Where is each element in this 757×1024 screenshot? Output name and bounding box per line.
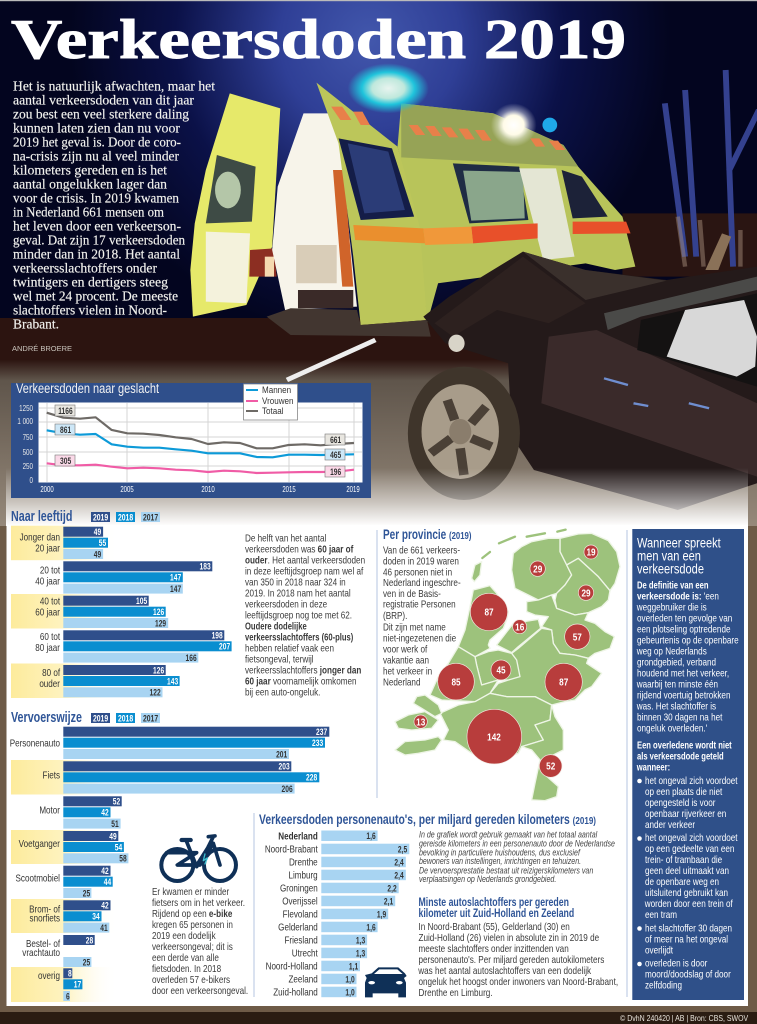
bullet list: geen deel uitmaakt van [645,865,729,876]
legend: vervoerswijze years [91,713,160,724]
text block: per provincie [383,544,461,688]
text block: leeftijd toelichting: Oudere dodelijke [245,621,307,632]
bullet list: moord/doodslag of door [645,969,731,980]
subheading: minste autoslachtoffers: Minste autoslachtoffers per gereden [419,897,569,909]
bullet list: het slachtoffer 30 dagen [645,922,732,934]
values [94,527,231,698]
text block: leeftijd toelichting: verkeersslachtoffers (60-plus) [245,632,353,643]
chart heading: Verkeersdoden naar geslacht [16,381,159,396]
definition: Een overledene wordt niet [637,740,732,751]
footer credit: © DvhN 240420 | AB | Bron: CBS, SWOV [620,1013,749,1023]
text block: leeftijd toelichting: ouder. Het aantal verkeersdoden [245,555,365,566]
icon: car [365,967,407,997]
values: 25 [83,888,91,899]
text block: e-bike: 2019 een dodelijk [152,930,216,941]
text block: leeftijd toelichting: bij een auto-ongeluk. [245,687,320,698]
definition: wanneer: [636,762,670,773]
bars 2018 [63,738,325,989]
text block: per provincie: Nederland [383,677,420,688]
intro text: zou best een veel sterkere daling [13,107,189,122]
mode labels: Fiets [43,769,60,781]
text block: autoslachtoffers: meeste slachtoffers onder inzittenden van [418,943,569,954]
x axis labels [40,486,360,494]
y axis labels: 0 [30,476,33,485]
heading: naar leeftijd: Naar leeftijd [11,507,72,524]
intro text: na-crisis zijn nu al veel minder [13,149,180,164]
legend: Vrouwen [262,395,294,406]
bars 2017 [63,549,198,697]
bullet list: de openbare weg en [645,876,719,887]
definition: rijdend voertuig betrokken [637,689,730,701]
panel: line chart verkeersdoden naar geslacht [11,381,371,498]
map values: 142 [487,730,501,743]
definition: binnen 30 dagen na het [637,712,723,723]
definition: waarbij ten minste één [636,678,718,690]
bullet list [637,775,738,991]
intro text [13,79,215,332]
values: 49 [109,831,117,842]
values: 198 [212,630,223,641]
text block: leeftijd toelichting: van 350 in 2018 naar 324 in [245,577,346,588]
definition: was. Het slachtoffer is [636,701,716,712]
panel heading: Wanneer spreekt [637,535,721,551]
values: 1,9 [377,909,387,920]
values: 1,6 [366,922,376,933]
legend: vervoerswijze years: 2017 [143,713,158,724]
bullet list: overlijdt [645,944,673,956]
values: 42 [101,807,109,818]
province labels: Groningen [280,883,318,894]
age labels [20,532,60,689]
intro text: minder dan in 2018. Het aantal [13,247,180,262]
province labels: Drenthe [289,857,318,868]
text block: e-bike: fietsers om in het verkeer. [152,897,245,908]
y axis labels: 1 000 [17,417,33,426]
text block: leeftijd toelichting: hebben relatief vaak een [245,643,334,654]
panel: wanneer spreekt men van een verkeersdode [632,529,744,1000]
mode labels: vrachtauto [22,947,60,958]
values: 228 [306,772,318,783]
province labels [265,831,318,998]
values: 6 [66,991,70,1002]
x axis labels: 2005 [120,486,134,494]
intro text: aantal verkeersdoden van dit jaar [13,93,195,108]
panel heading: men van een [637,548,701,564]
text block: per provincie: 46 personen niet in [383,566,452,578]
bullet list: uitsluitend gebruikt kan [645,887,728,898]
age labels: 60 tot [40,631,60,642]
heading: per provincie: Per provincie (2019) [383,526,471,542]
values: 1,6 [366,831,376,842]
values: 2,2 [387,883,397,894]
mode labels: Brom- of [29,903,60,915]
panel: line chart verkeersdoden naar geslacht: 305 [60,456,72,466]
map values: 57 [573,630,582,643]
note: methode: verplaatsingen op Nederlands grondgebied. [419,874,556,884]
intro text: aantal ongelukken lager dan [13,177,167,192]
note: methode [419,830,615,884]
text block: per provincie: ven in de Basis- [383,588,441,599]
values: 8 [68,968,72,979]
values: 1,1 [349,961,359,972]
values: 17 [74,979,82,990]
y axis labels: 250 [23,462,33,471]
values: 166 [186,653,197,663]
age labels: 80 jaar [35,642,60,653]
y axis labels: 750 [23,433,33,442]
text block: per provincie: vakantie aan [383,655,429,666]
text block: leeftijd toelichting: fietsongeval, terwijl [245,654,314,665]
text block: per provincie: Van de 661 verkeers- [383,544,460,556]
text block: e-bike [152,886,248,996]
text block: per provincie: Dit zijn met name [383,621,446,633]
age labels: 40 jaar [35,575,60,587]
definition: overleden ten gevolge van [637,612,732,624]
values: 2,1 [384,896,394,907]
values: 147 [170,584,182,594]
province labels: Zuid-holland [273,987,318,998]
text block: leeftijd toelichting: verkeersdoden was 60 jaar of [245,544,354,555]
values: 52 [113,796,121,807]
note: methode: In de grafiek wordt gebruik gemaakt van het totaal aantal [419,830,597,840]
text block: e-bike: overleden 57 e-bikers [152,974,230,985]
values: 147 [170,572,182,583]
panel: line chart verkeersdoden naar geslacht: 661 [330,435,342,445]
intro text: 2019 het geval is. Door de coro- [13,135,181,150]
values: 42 [101,900,109,911]
text block: e-bike: fietsdoden. In 2018 [152,963,221,974]
values: 105 [136,596,148,606]
legend: Totaal [262,405,284,416]
map values: 29 [581,586,591,599]
text block: e-bike: kregen 65 personen in [152,919,233,930]
mode labels: overig [38,970,60,981]
values: 1,0 [345,987,355,998]
values [66,727,328,1002]
y axis labels [17,404,33,485]
map values: 13 [416,715,425,728]
white content panel [6,525,748,1006]
bullet list: op een gedeelte van een [645,843,734,854]
map values: 19 [586,545,596,558]
values: 183 [200,561,211,572]
map values: 29 [533,562,542,575]
values: 1,3 [356,935,366,946]
text block: leeftijd toelichting: verkeersslachtoffers jonger dan [245,665,362,676]
panel: line chart verkeersdoden naar geslacht: 861 [60,425,72,435]
bullet list: het ongeval zich voordoet [645,775,738,786]
text block: e-bike: een derde van alle [152,952,219,963]
map: Nederland per provincie [395,530,620,801]
text block: per provincie: (BRP). [383,610,407,621]
panel heading [637,535,721,577]
legend: leeftijd years: 2017 [143,512,158,523]
values: 28 [86,935,94,946]
intro text: voor de crisis. In 2019 kwamen [13,191,179,206]
text block: per provincie: niet-ingezetenen die [383,632,456,644]
text block: e-bike: Rijdend op een e-bike [152,908,232,919]
legend [244,384,298,420]
bullet list: een tram [645,909,677,920]
series lines [47,413,354,473]
text block: per provincie: registratie Personen [383,599,456,610]
y axis labels: 1250 [19,404,33,413]
province labels: Limburg [289,870,318,881]
province labels: Friesland [284,935,318,946]
icon: e-bike [161,836,236,881]
bars 2018 [63,538,232,686]
age labels: 80 of [42,667,60,678]
intro text: slachtoffers vielen in Noord- [13,303,167,318]
values: 201 [276,749,288,760]
x axis labels: 2010 [201,486,215,494]
note: methode: gereisde kilometers in een personenauto door de Nederlandse [419,839,615,849]
text block: autoslachtoffers [417,921,618,998]
definition: ongeluk overleden.' [637,723,707,734]
mode labels: Voetganger [19,838,60,849]
values: 49 [94,527,102,537]
bars 2019 [63,727,329,978]
province labels: Noord-Brabant [265,844,318,855]
panel: line chart verkeersdoden naar geslacht: 196 [330,467,342,477]
province labels: Utrecht [292,948,318,959]
values: 143 [167,676,179,687]
map values: 52 [546,759,555,772]
values [345,831,408,998]
values: 34 [92,911,100,922]
values: 126 [153,607,165,617]
text block: per provincie: het verkeer in [383,665,432,677]
map values: 87 [559,675,568,688]
heading: per miljard gereden kilometers: Verkeersdoden personenauto's, per miljard gereden kilometers (2019) [259,812,596,827]
values: 237 [316,727,328,737]
bar chart: vervoerswijze [10,727,329,1002]
map values: 87 [484,605,494,618]
map values: 45 [496,663,506,676]
mode labels: Scootmobiel [16,873,60,884]
bullet list: overleden is door [645,958,707,969]
text block: leeftijd toelichting: leeftijdsgroep nog toe met 62. [245,610,352,621]
intro text: Het is natuurlijk afwachten, maar het [13,79,215,94]
values: 2,4 [394,870,404,881]
x axis labels: 2000 [40,486,54,494]
bullet list: het ongeval zich voordoet [645,832,738,843]
map values [416,545,596,772]
panel: line chart verkeersdoden naar geslacht: 1166 [58,406,73,416]
y axis labels: 500 [23,448,33,457]
province circles [414,545,598,777]
mode labels: Motor [39,804,60,816]
text block: leeftijd toelichting [245,533,365,698]
values: 2,5 [398,844,408,855]
text block: leeftijd toelichting: verkeersdoden in deze [245,599,327,610]
intro text: het leven door een verkeerson- [13,219,181,234]
definition: een plotseling optredende [637,623,731,635]
mode labels: Personenauto [10,738,60,749]
photo credit: ANDRÉ BROERE [12,344,72,353]
legend: leeftijd years [91,512,160,523]
definition: weg op Nederlands [636,645,707,657]
legend: vervoerswijze years: 2018 [118,713,133,724]
bar chart: naar leeftijd [11,526,232,698]
age labels: 40 tot [40,595,60,607]
note: methode: De vervoersprestatie bestaat uit reizigerskilometers van [419,865,594,876]
title: Verkeersdoden 2019 [11,9,626,71]
definition: De definitie van een [637,579,708,591]
text block: e-bike: door een verkeersongeval. [152,985,248,996]
data labels [55,405,345,477]
values: 1,0 [345,974,355,985]
province labels: Nederland [278,831,318,842]
subheading: minste autoslachtoffers: kilometer uit Zuid-Holland en Zeeland [419,908,574,920]
intro text: kilometers gereden en is het [13,163,167,178]
values: 51 [111,819,119,829]
definition: grondgebied, verband [637,656,716,668]
bullet list: worden door een trein of [644,898,733,909]
bullet list: openbaar rijverkeer en [645,808,726,819]
legend: vervoerswijze years: 2019 [93,713,108,724]
province labels: Flevoland [283,909,318,920]
intro text: twintigers en dertigers steeg [13,275,168,290]
values: 2,4 [394,857,404,868]
age labels: 20 tot [40,564,60,576]
province labels: Zeeland [289,974,318,985]
definition: als verkeersdode geteld [637,751,724,762]
values: 54 [115,842,123,853]
age labels: Jonger dan [20,532,60,543]
legend: leeftijd years: 2018 [118,512,133,523]
x axis labels: 2019 [346,486,360,494]
age labels: 60 jaar [35,606,60,618]
text block: leeftijd toelichting: 60 jaar voornamelijk omkomen [245,676,357,687]
values: 233 [312,738,324,748]
text block: leeftijd toelichting: 2019. In 2018 nam het aantal [245,588,351,599]
text block: autoslachtoffers: ongeluk het hoogst onder inwoners van Noord-Brabant, [418,976,618,987]
legend: Mannen [262,384,291,395]
text block: e-bike: Er kwamen er minder [152,886,229,897]
values: 122 [150,687,161,698]
bars 2017 [63,749,295,1001]
definition: gebeurtenis op de openbare [637,634,739,646]
bullet list: of meer na het ongeval [645,933,728,945]
bullet list: op een plaats die niet [645,786,723,797]
values: 1,3 [356,948,366,959]
mode labels [10,738,60,981]
wadden islands [482,530,566,558]
subheading: minste autoslachtoffers [419,897,574,920]
values: 58 [119,853,127,864]
values: 44 [104,877,112,887]
definition: houdend met het verkeer, [637,667,729,679]
bullet list: opengesteld is voor [645,797,715,808]
text block: per provincie: voor werk of [383,643,428,655]
province labels: Gelderland [278,922,318,933]
text block: autoslachtoffers: In Noord-Brabant (55), Gelderland (30) en [418,921,570,932]
text block: autoslachtoffers: Zuid-Holland (26) vielen in absolute zin in 2019 de [418,932,599,943]
text block: leeftijd toelichting: in deze leeftijdsgroep nam wel af [245,566,364,577]
bullet list: ander verkeer [645,819,695,830]
text block: autoslachtoffers: was het aantal autoslachtoffers van een dodelijk [417,965,591,976]
panel heading: verkeersdode [637,561,704,577]
definition [636,579,739,773]
intro text: geval. Dat zijn 17 verkeersdoden [13,233,185,248]
values: 42 [101,866,109,876]
bar chart: per miljard kilometers [265,830,409,998]
values: 25 [83,957,91,968]
map values: 16 [515,620,524,633]
province labels: Overijssel [282,896,318,907]
note: methode: bevolking in particuliere huishoudens, dus exclusief [419,847,581,858]
values: 126 [153,665,165,676]
panel: line chart verkeersdoden naar geslacht: 465 [330,450,342,460]
province labels: Noord-Holland [266,961,318,972]
mode labels: snorfiets [30,913,60,924]
age labels: ouder [39,678,60,689]
text block: per provincie: doden in 2019 waren [383,555,459,567]
values: 207 [219,641,231,652]
text block: leeftijd toelichting: De helft van het aantal [245,533,326,544]
text block: autoslachtoffers: personenauto's. Per miljard gereden autokilometers [418,954,605,965]
x axis labels: 2015 [282,486,296,494]
mode labels: Bestel- of [26,938,60,949]
values: 129 [155,618,167,629]
bars 2019 [63,527,224,675]
intro text: verkeersslachtoffers onder [13,261,158,276]
bullet list: zelfdoding [645,980,682,991]
heading: vervoerswijze: Vervoerswijze [11,708,82,725]
note: methode: bewoners van instellingen, inrichtingen en tehuizen. [419,856,581,866]
text block: e-bike: verkeersongeval; dit is [152,941,233,952]
legend: leeftijd years: 2019 [93,512,108,523]
bullet list: trein- of trambaan die [645,854,722,865]
intro text: Brabant. [13,317,59,332]
definition: verkeersdode is: 'een [637,590,719,602]
text block: autoslachtoffers: Drenthe en Limburg. [418,987,493,998]
values: 203 [279,761,290,772]
definition: weggebruiker die is [636,601,707,613]
map values: 85 [451,675,461,688]
values: 206 [282,784,293,794]
age labels: 20 jaar [35,543,60,554]
text block: per provincie: Nederland ingeschre- [383,577,461,588]
intro text: wel met 24 procent. De meeste [13,289,178,304]
values: 41 [100,923,108,933]
intro text: kunnen laten zien dan nu voor [13,121,181,136]
values: 49 [94,549,102,560]
values: 55 [99,538,107,548]
intro text: in Nederland 661 mensen om [13,205,165,220]
